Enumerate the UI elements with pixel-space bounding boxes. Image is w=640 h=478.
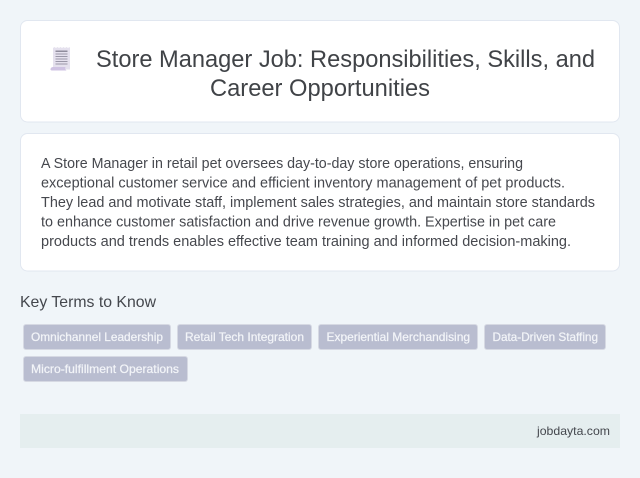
chip: experiential merchandising: Experiential Merchandising xyxy=(326,330,470,344)
key term chips xyxy=(24,324,606,382)
chip: micro-fulfillment operations xyxy=(24,356,188,382)
title: Career Opportunities xyxy=(210,75,430,102)
chip: omnichannel leadership xyxy=(24,324,170,350)
chip: experiential merchandising xyxy=(318,324,478,350)
panel: description card xyxy=(20,134,620,271)
chip: data-driven staffing: Data-Driven Staffing xyxy=(492,330,598,344)
chip: data-driven staffing xyxy=(484,324,606,350)
chip: retail tech integration: Retail Tech Integration xyxy=(185,330,304,344)
panel: header card xyxy=(20,20,620,122)
chip: micro-fulfillment operations: Micro-fulfillment Operations xyxy=(31,362,179,376)
heading: key terms: Key Terms to Know xyxy=(20,294,156,311)
text block: description: products and trends enables effective team training and informed decision-making. xyxy=(41,234,571,250)
text block: description: They lead and motivate staff, implement sales strategies, and maintain store standards xyxy=(41,195,595,211)
chip: retail tech integration xyxy=(178,324,312,350)
title: Store Manager Job: Responsibilities, Skills, and xyxy=(96,46,595,73)
footer source text: jobdayta.com xyxy=(536,424,610,438)
text block: description: A Store Manager in retail pet oversees day-to-day store operations, ensuring xyxy=(41,156,523,172)
icon: receipt document xyxy=(50,47,70,70)
text block: description: exceptional customer service and efficient inventory management of pet products. xyxy=(41,176,565,192)
title xyxy=(96,46,595,102)
text block: description: to enhance customer satisfaction and drive revenue growth. Expertise in pet care xyxy=(41,214,556,230)
text block: description xyxy=(41,156,595,250)
footer bar xyxy=(20,414,620,448)
chip: omnichannel leadership: Omnichannel Leadership xyxy=(31,330,163,344)
